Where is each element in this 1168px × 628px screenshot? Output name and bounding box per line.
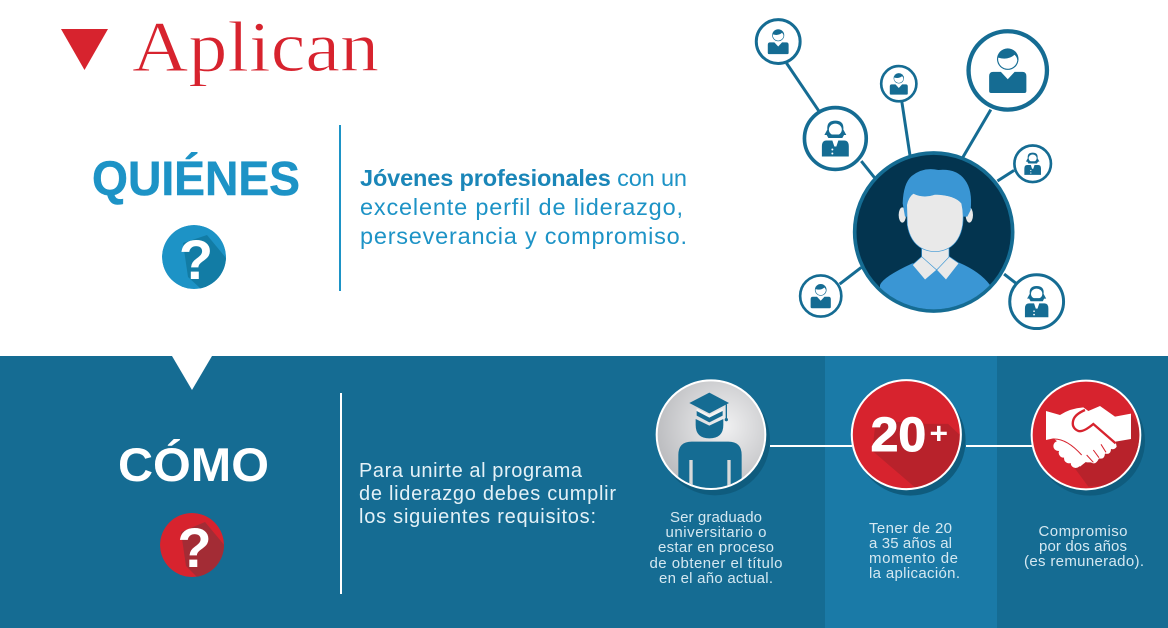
text block: requirement one: estar en proceso (658, 539, 774, 556)
text block: requirement two (869, 520, 960, 582)
text block: requirement two: a 35 años al (869, 535, 952, 552)
panel: blue bottom section (0, 356, 1168, 628)
text block: cómo description (359, 460, 616, 528)
icon: 20+ badge (852, 380, 977, 496)
icon: person top centre (881, 66, 916, 101)
text block: requirement one: universitario o (666, 524, 766, 541)
icon: woman bottom right (1010, 275, 1064, 329)
icon: handshake (1032, 381, 1145, 496)
heading: cómo: CÓMO (118, 438, 269, 491)
icon: woman right (1014, 146, 1051, 182)
text block: quiénes description: perseverancia y compromiso. (360, 223, 687, 249)
connector lines (770, 445, 1034, 447)
title: Aplican (132, 7, 379, 87)
icon: red question mark: ? (177, 516, 212, 579)
text block: quiénes description (360, 165, 687, 249)
icon: blue question mark: ? (179, 228, 213, 291)
icon: red question mark (160, 513, 224, 577)
text block: requirement three (1024, 523, 1144, 570)
icon: 20+ badge: 20 (871, 408, 926, 462)
icon: woman left (804, 108, 866, 169)
divider: quiénes (339, 125, 341, 291)
text block: requirement two: momento de (869, 550, 958, 567)
panel: white top section (0, 0, 1168, 356)
text block: requirement one: de obtener el título (650, 555, 782, 572)
text block: cómo description: de liderazgo debes cumplir (359, 483, 616, 505)
text block: requirement one (650, 509, 782, 587)
network of people (756, 20, 1064, 329)
icon: central person (855, 153, 1013, 317)
divider: cómo (340, 393, 342, 594)
text block: cómo description: Para unirte al programa (359, 460, 583, 482)
text block: requirement one: Ser graduado (670, 509, 762, 526)
icon: 20+ badge: + (930, 417, 948, 450)
notch pointer (172, 356, 212, 390)
icon: graduate (657, 380, 770, 495)
text block: requirement one: en el año actual. (659, 570, 773, 587)
text block: requirement two: Tener de 20 (869, 520, 952, 537)
text block: cómo description: los siguientes requisitos: (359, 506, 596, 528)
icon: person bottom left (800, 275, 841, 317)
icon: person top left (756, 20, 800, 63)
panel: lighter middle column (825, 356, 997, 628)
text block: requirement three: (es remunerado). (1024, 553, 1144, 570)
icon: red down triangle (61, 29, 108, 70)
text block: requirement two: la aplicación. (869, 565, 960, 582)
icon: large person top right (969, 31, 1047, 110)
icon: blue question mark (162, 225, 226, 289)
text block: quiénes description: excelente perfil de liderazgo, (360, 194, 683, 220)
text block: requirement three: Compromiso (1038, 523, 1128, 540)
text block: requirement three: por dos años (1039, 538, 1127, 555)
heading: quiénes: QUIÉNES (92, 152, 300, 206)
text block: quiénes description: Jóvenes profesionales con un (360, 165, 687, 191)
